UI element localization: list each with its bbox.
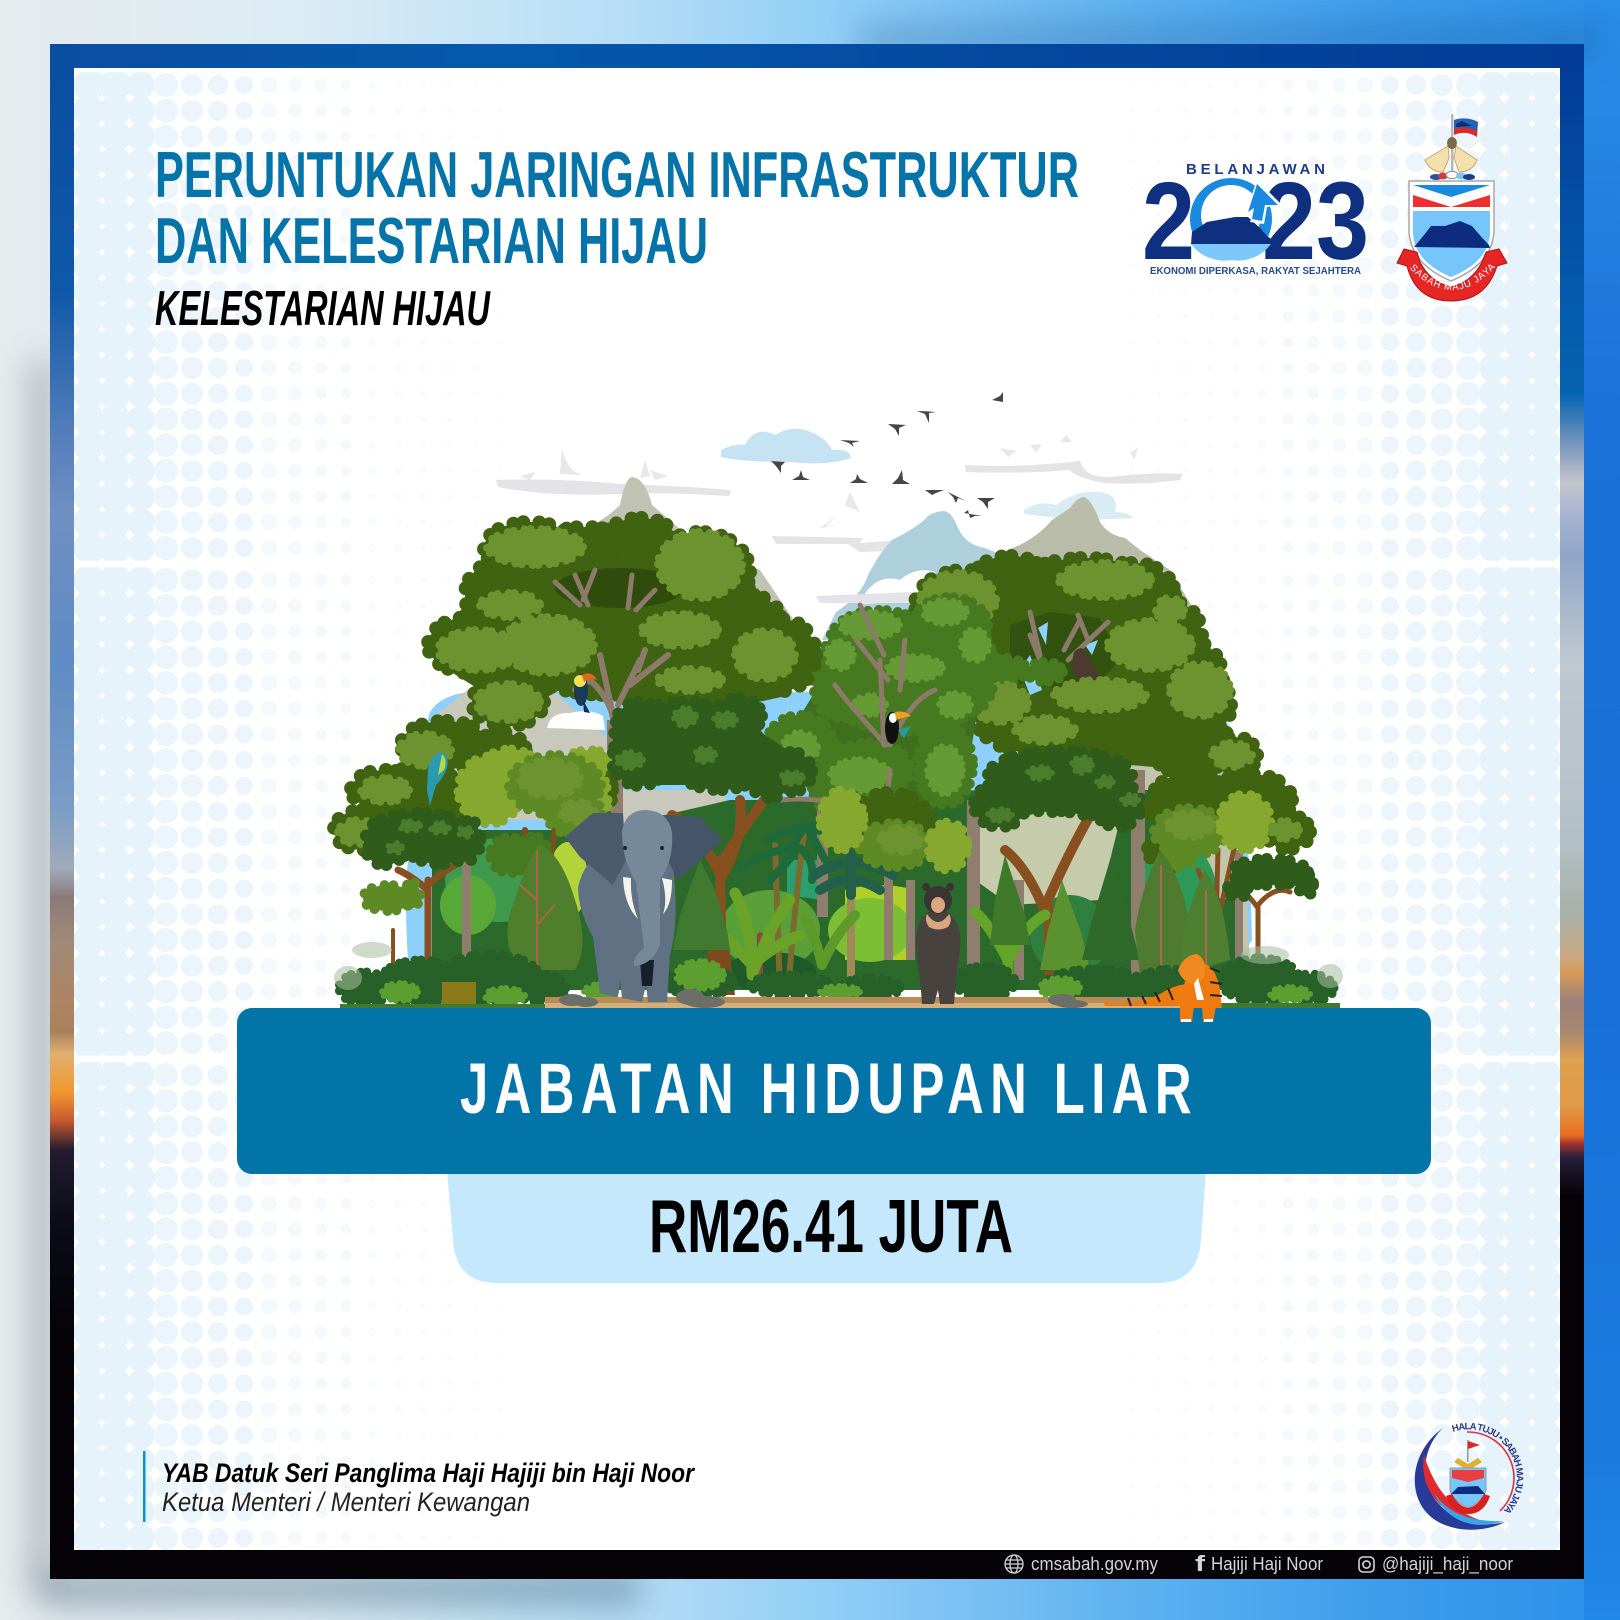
canopy gap with sky and branches (983, 612, 1120, 695)
logo: Hala Tuju emblem (1414, 1422, 1524, 1530)
dark lower-left tree (366, 813, 480, 865)
panel: amount backing (447, 1170, 1206, 1283)
ground shrubs (334, 942, 1343, 1004)
logo: Belanjawan 2023: BELANJAWAN (1186, 161, 1325, 178)
accent line (143, 1451, 146, 1522)
title: PERUNTUKAN JARINGAN INFRASTRUKTUR (155, 138, 1079, 211)
tiger (1103, 954, 1222, 1010)
conifer shrubs (508, 845, 582, 970)
toucan right (885, 712, 911, 744)
logo: Belanjawan 2023: EKONOMI DIPERKASA, RAKYAT SEJAHTERA (1150, 265, 1361, 277)
panel: department band (237, 1008, 1431, 1174)
canopy: right big tree (915, 556, 1257, 775)
logo: Belanjawan 2023: 3 (1316, 160, 1369, 283)
icon: instagram (1359, 1557, 1374, 1572)
forest illustration (334, 392, 1343, 1010)
palms (742, 825, 893, 895)
shield (1409, 181, 1494, 281)
frame bottom strip (50, 1550, 1584, 1579)
flag (1451, 114, 1478, 176)
logo: Sabah crest: SABAH MAJU JAYA (1410, 264, 1496, 290)
canopy: dark centre-left tree (612, 698, 812, 798)
understory base (432, 790, 1236, 990)
toucan left (574, 673, 597, 713)
logo: Hala Tuju emblem: HALA TUJU • SABAH MAJU JAYA (1452, 1422, 1524, 1513)
understory colour wash (440, 838, 1217, 992)
chief minister credit: YAB Datuk Seri Panglima Haji Hajiji bin Haji Noor (162, 1458, 695, 1488)
canopy: centre tree (766, 597, 995, 850)
parrot (427, 752, 448, 806)
canopy: front centre light tree (820, 790, 968, 870)
title: DAN KELESTARIAN HIJAU (155, 204, 708, 277)
chief minister credit (143, 1451, 695, 1522)
subtitle: KELESTARIAN HIJAU (155, 282, 491, 336)
department name: JABATAN HIDUPAN LIAR (460, 1050, 1198, 1129)
title (155, 138, 1079, 277)
social links: @hajiji_haji_noor (1382, 1554, 1513, 1575)
chief minister credit: Ketua Menteri / Menteri Kewangan (162, 1487, 530, 1517)
icon: facebook: f (1195, 1551, 1206, 1576)
canopy: lower right trees (1148, 773, 1313, 898)
mountain beige backdrop (975, 800, 1125, 905)
trunks (462, 720, 1243, 990)
canopy gap and branches (555, 568, 685, 725)
beads (1430, 171, 1475, 180)
green clumps in gap (983, 658, 1063, 682)
birds (771, 392, 1003, 518)
mini crest (1446, 1440, 1490, 1514)
mountains (430, 477, 1250, 960)
canopy: dark centre-right tree (974, 751, 1142, 827)
clouds (496, 429, 1183, 552)
arms (1425, 146, 1477, 172)
conifers (673, 850, 1230, 975)
frame left strip (50, 68, 74, 1550)
logo: Belanjawan 2023 (1142, 160, 1369, 283)
rocks (559, 989, 1088, 1008)
right side tone (1584, 0, 1620, 1620)
social links (1005, 1551, 1513, 1576)
elephant (565, 810, 723, 1002)
drop shadow left (30, 360, 54, 1590)
canopy: left big tree (428, 518, 816, 726)
logo: Sabah crest (1396, 114, 1508, 302)
frame right strip (1560, 68, 1584, 1550)
drop shadow bottom (40, 1572, 640, 1606)
tiger paws (1180, 1006, 1216, 1022)
logo: Belanjawan 2023: 2 (1142, 160, 1195, 283)
sky backdrop (406, 692, 1252, 960)
social links: cmsabah.gov.my (1031, 1554, 1158, 1574)
canopy: left side trees (334, 721, 616, 970)
small left tree (363, 882, 420, 911)
social links: Hajiji Haji Noor (1211, 1554, 1323, 1574)
ground (340, 982, 1340, 1008)
drop shadow top (860, 26, 1600, 52)
bear (916, 883, 960, 1004)
ribbon (1397, 249, 1507, 301)
amount: RM26.41 JUTA (649, 1184, 1013, 1268)
icon: globe (1005, 1555, 1023, 1573)
logo: Belanjawan 2023: 2 (1262, 160, 1316, 283)
frame top strip (50, 44, 1584, 68)
small dark right tree (1228, 859, 1313, 898)
banana leaves (715, 893, 1045, 985)
